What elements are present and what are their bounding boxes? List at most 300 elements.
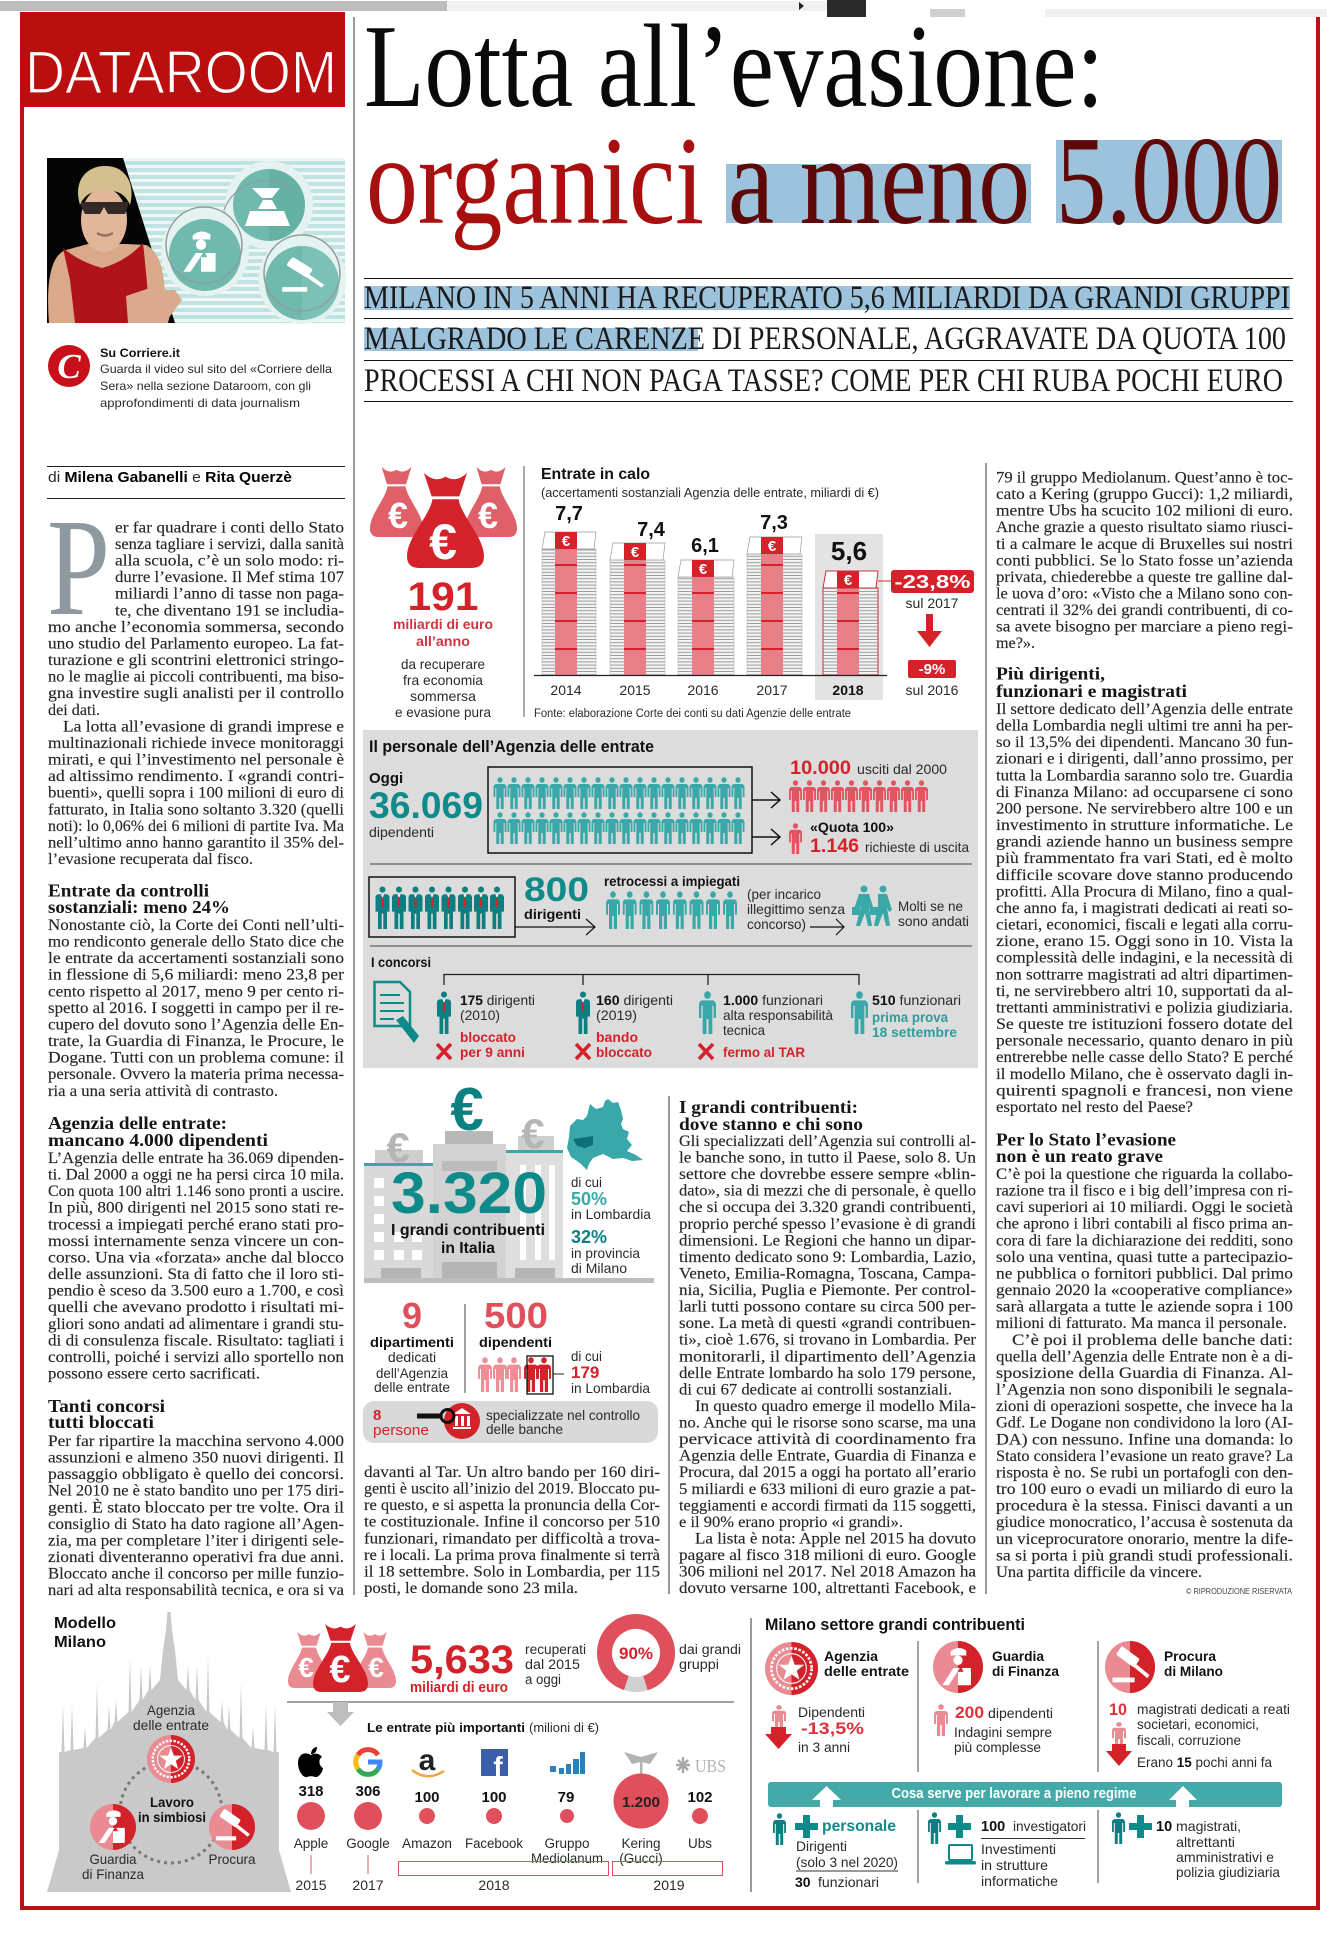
retrocessi a impiegati: [604, 874, 740, 929]
article column 2 continuation: posti, le domande sono 23 mila.: [364, 1580, 578, 1597]
node: Agenzia delle entrate: delle entrate: [133, 1717, 209, 1733]
note: molti se ne sono andati: sono andati: [898, 913, 969, 929]
stat: 5,633 miliardi: €: [329, 1649, 351, 1691]
article column 4: bottom: C’è poi la questione che riguarda la collabo-: [996, 1166, 1293, 1183]
bar 2017: €: [768, 538, 777, 555]
arrows out: [752, 792, 780, 845]
percent change callouts: -9%: [919, 661, 945, 678]
heading: tanti concorsi: Tanti concorsi: [48, 1396, 165, 1416]
stat: quota 100: 1.146: [810, 836, 859, 857]
bar 2016: €: [699, 561, 708, 578]
map: Lombardia: [567, 1099, 643, 1170]
title: Lotta all’evasione:: [364, 0, 1104, 132]
article column 1: concorsi: zionati diventeranno operativi fra due anni.: [48, 1549, 344, 1566]
article column 1: intro: turazione e gli scontrini elettronici stringo-: [48, 652, 344, 669]
company names: Mediolanum: [531, 1851, 603, 1866]
concorso: 160 dirigenti: (2019): [596, 1007, 637, 1023]
Corriere.it promo: C: [57, 347, 81, 386]
presenter: [48, 166, 182, 323]
heading: per lo stato: [996, 1129, 1176, 1166]
Guardia di Finanza column: dipendenti: [988, 1705, 1053, 1721]
article column 2 continuation: te costituzionale. Infine il concorso per 510: [364, 1514, 660, 1531]
panel: Milano settore grandi contribuenti: Milano settore grandi contribuenti: [765, 1616, 1025, 1634]
subheadline: [364, 278, 1293, 402]
bar 2016: [678, 535, 734, 675]
year labels: 2017: [756, 682, 788, 698]
need: personale: personale: [822, 1818, 896, 1835]
article column 1: intro: mirati, e qui l’investimento nel personale è: [48, 752, 344, 768]
drop cap: P: [47, 491, 110, 645]
heading: agenzia delle entrate: [48, 1113, 268, 1150]
heading: i grandi contribuenti: dove stanno e chi sono: [679, 1114, 863, 1134]
money bags: 191 billion: [370, 467, 517, 720]
panel: modello Milano: [47, 1612, 291, 1892]
article column 4: bottom: giudice monocratico, l’accusa è sostenuta da: [996, 1514, 1293, 1531]
years: 2018: [478, 1877, 510, 1893]
article column 1: agenzia: di di consulenza fiscale. Risultato: tagliati i: [48, 1332, 345, 1349]
logo: Apple: [298, 1747, 323, 1777]
buildings: 3.320 grandi contribuenti: €: [521, 1110, 545, 1157]
article column 4: top: privata, chiederebbe a queste tre galline dal-: [996, 569, 1293, 586]
heading: i grandi contribuenti: [679, 1097, 863, 1134]
article column 3: pagare al fisco 318 milioni di euro. Google: [679, 1547, 976, 1564]
chart: entrate in calo: (accertamenti sostanziali Agenzia delle entrate, miliardi di €): [541, 486, 879, 500]
money bags: 191 billion: €: [429, 514, 457, 570]
need: 10 magistrati: amministrativi e: [1176, 1849, 1274, 1865]
article column 4: middle: non sottrarre magistrati ad altri dipartimen-: [996, 966, 1293, 983]
concorso: 510 funzionari: prima prova: [872, 1009, 948, 1025]
article column 4: middle: della Lombardia negli ultimi tre anni ha per-: [996, 718, 1293, 735]
article column 1: agenzia: delle assunzioni. Sta di fatto che il loro sti-: [48, 1266, 344, 1283]
Procura di Milano column: di Milano: [1164, 1663, 1223, 1679]
heading: i grandi contribuenti: I grandi contribuenti:: [679, 1097, 858, 1117]
article column 1: agenzia: corso. Una via «forzata» anche dal blocco: [48, 1250, 344, 1266]
chart: le entrate più importanti: [294, 1720, 726, 1893]
concorso: 175 dirigenti: (2010): [460, 1007, 500, 1023]
byline: [47, 466, 345, 498]
article column 3: e il 90% erano proprio «i grandi».: [679, 1514, 903, 1531]
article column 4: bottom: Gdf. Le Dogane non condividono la loro (AI-: [996, 1415, 1293, 1432]
stat: 800 dirigenti: dirigenti: [524, 906, 581, 922]
callout: 8 persone banche: 8: [373, 1407, 381, 1424]
article column 3: pervicace attività di coordinamento fra: [679, 1431, 976, 1448]
company names: Google: [346, 1836, 390, 1851]
icon circles: [161, 161, 346, 324]
article column 3: larli tutti possono contare su circa 500 per-: [679, 1299, 976, 1316]
heading: più dirigenti: Più dirigenti,: [996, 664, 1105, 684]
Corriere.it promo: Sera» nella sezione Dataroom, con gli: [100, 379, 311, 393]
Agenzia delle entrate column: in 3 anni: [798, 1739, 850, 1755]
article column 1: concorsi: nari ad alta responsabilità tecnica, e ora si va: [48, 1582, 344, 1599]
company names: Gruppo: [544, 1836, 590, 1851]
logo: UBS: [676, 1756, 726, 1776]
article column 4: bottom: sposizione della Guardia di Finanza. Al-: [996, 1365, 1293, 1382]
stat: Lombardia percentages: [571, 1174, 651, 1276]
bar 2017: 7,3: [760, 512, 788, 534]
Corriere.it promo: Guarda il video sul sito del «Corriere della: [100, 362, 332, 376]
stat: 5,633 miliardi: 5,633: [410, 1638, 514, 1682]
heading: entrate da controlli: Entrate da controlli: [48, 881, 209, 901]
panel: il personale dell'Agenzia delle entrate: [363, 730, 978, 1068]
donut: 90%: 90%: [619, 1644, 653, 1663]
article column 4: middle: ti, ne servirebbero altri 10, supportati da al-: [996, 983, 1293, 1000]
donut: 90%: dai grandi: [679, 1642, 741, 1657]
heading: più dirigenti: [996, 664, 1187, 701]
article column 4: top: sa avete bisogno per marciare a pieno regi-: [996, 619, 1293, 636]
stat: 10.000 usciti: [789, 758, 947, 812]
article column 4: bottom: tro 100 euro o evadi un miliardo di euro la: [996, 1481, 1293, 1498]
Guardia di Finanza column: Indagini sempre: [954, 1724, 1052, 1740]
node: Procura: Procura: [208, 1851, 256, 1867]
article column 1: intro: fatturato, in Italia sono soltanto 3.320 (quelli: [48, 801, 345, 818]
article column 1: intro: La lotta all’evasione di grandi imprese e: [63, 718, 344, 735]
money bags: 191 billion: €: [478, 495, 498, 536]
article column 3: timento dedicato sono 9: Lombardia, Lazio,: [679, 1249, 976, 1266]
node: Guardia di Finanza: di Finanza: [82, 1866, 144, 1882]
stat: Lombardia percentages: in Lombardia: [571, 1206, 651, 1222]
article column 4: middle: zionari e i dirigenti, dall’anno prossimo, per: [996, 751, 1294, 768]
company names: Ubs: [688, 1836, 712, 1851]
node: Procura: [208, 1804, 256, 1867]
bar 2015: 7,4: [637, 519, 666, 541]
donut: 90%: gruppi: [679, 1657, 719, 1672]
stat: 36.069 dipendenti: Oggi: [369, 770, 403, 787]
node: Agenzia delle entrate: [133, 1702, 209, 1783]
article column 1: concorsi: genti. È stato bloccato per tre volte. Ora il: [48, 1499, 344, 1516]
stat: 36.069 dipendenti: [369, 770, 483, 840]
article column 3: sone. La metà di questi «grandi contribuen-: [679, 1315, 976, 1332]
logo: Facebook: [481, 1749, 508, 1782]
stat: 500 dipendenti: dipendenti: [479, 1334, 552, 1350]
money bags: 191 billion: sommersa: [410, 688, 476, 704]
buildings: 3.320 grandi contribuenti: [364, 1076, 654, 1283]
concorso: 160 dirigenti: 160 dirigenti: [596, 992, 673, 1008]
bar 2014: 7,7: [555, 503, 583, 525]
years: 2015: [295, 1877, 327, 1893]
percent change callouts: sul 2017: [906, 595, 959, 611]
buildings: 3.320 grandi contribuenti: 3.320: [391, 1161, 547, 1226]
need: personale: (solo 3 nel 2020): [796, 1854, 898, 1870]
concorso: 510 funzionari: 18 settembre: [872, 1024, 957, 1040]
year labels: 2015: [619, 682, 651, 698]
article column 3: dimensioni. Le Regioni che hanno un dipar-: [679, 1232, 976, 1249]
article column 4: bottom: cora di fare la dichiarazione dei redditi, sono: [996, 1232, 1293, 1249]
article column 4: middle: difficile scovare dove stanno producendo: [996, 867, 1293, 884]
stat: 36.069 dipendenti: dipendenti: [369, 824, 434, 840]
values: 100: [414, 1789, 440, 1806]
i concorsi heading: I concorsi: [371, 954, 431, 970]
article column 1: entrate: le entrate da accertamenti sostanziali sono: [48, 950, 344, 967]
article column 1: entrate: cupero del dovuto sono l’Agenzia delle En-: [48, 1016, 344, 1034]
article column 3: delle Entrate lombardo ha solo 179 persone,: [679, 1365, 976, 1382]
stat: 10.000 usciti: 10.000: [790, 758, 851, 779]
article column 3: le banche sono, in tutto il Paese, solo 8. Un: [679, 1150, 976, 1167]
article column 1: intro: noti): lo 0,06% dei 6 milioni di partite Iva. Ma: [48, 818, 344, 835]
article column 1: agenzia: ti. Dal 2000 a oggi ne ha persi circa 10 mila.: [48, 1167, 344, 1184]
logo: Amazon: a: [419, 1744, 436, 1777]
masthead: Dataroom: DATAROOM: [25, 39, 337, 106]
heading: più dirigenti: funzionari e magistrati: [996, 681, 1187, 701]
article column 1: agenzia: trocessi a impiegati perché erano stati pro-: [48, 1216, 344, 1233]
need: personale: funzionari: [818, 1874, 879, 1890]
article column 1: concorsi: consiglio di Stato ha dato ragione all’Agen-: [48, 1516, 344, 1533]
bar 2014: [542, 503, 596, 675]
article column 1: agenzia: In più, 800 dirigenti nel 2015 sono stati re-: [48, 1200, 344, 1217]
stat: 36.069 dipendenti: 36.069: [369, 785, 483, 826]
article column 3: [679, 1133, 977, 1597]
article column 1: agenzia: possono essere certo sacrificati.: [48, 1366, 260, 1382]
title: organici: [366, 112, 704, 251]
buildings: 3.320 grandi contribuenti: €: [450, 1076, 484, 1143]
stat: 500 dipendenti: di cui: [571, 1348, 602, 1364]
article column 1: entrate: mo rendiconto generale dello Stato dice che: [48, 934, 344, 951]
need: 10 magistrati: magistrati,: [1176, 1818, 1241, 1834]
stat: 800 dirigenti: [515, 871, 595, 935]
article column 4: bottom: zioni di operazioni sospette, che invece ha la: [996, 1398, 1293, 1415]
concorso: 160 dirigenti: bloccato: [596, 1044, 652, 1060]
need: personale: 30: [795, 1874, 811, 1890]
values: [298, 1783, 713, 1811]
company names: Kering: [621, 1836, 661, 1851]
article column 3: La lista è nota: Apple nel 2015 ha dovuto: [695, 1530, 976, 1547]
vertical column rule: [353, 17, 355, 1595]
stat: Lombardia percentages: 50%: [571, 1189, 607, 1209]
year labels: 2014: [550, 682, 582, 698]
heading: per lo stato: non è un reato grave: [996, 1146, 1163, 1166]
article column 4: middle: 200 persone. Ne servirebbero altre 100 e un: [996, 800, 1293, 818]
stat: quota 100: richieste di uscita: [865, 839, 969, 855]
logo: Facebook: f: [493, 1751, 503, 1782]
article column 1: intro: nell’ultimo anno hanno garantito il 35% del-: [48, 834, 344, 851]
icon: people walking away: [852, 886, 892, 926]
lavoro in simbiosi: in simbiosi: [138, 1809, 206, 1825]
article column 3: 306 milioni nel 2017. Nel 2018 Amazon ha: [679, 1564, 976, 1581]
year labels: 2018: [832, 682, 864, 698]
article column 3: monitorarli, il dipartimento dell’Agenzia: [679, 1348, 976, 1365]
article column 4: bottom: DA) con nessuno. Infine una domanda: lo: [996, 1431, 1293, 1448]
stat: 500 dipendenti: 500: [484, 1295, 548, 1336]
byline: di Milena Gabanelli e Rita Querzè: [48, 469, 292, 486]
article column 4: middle: grandi aziende hanno un business sempre: [996, 834, 1293, 851]
company names: Amazon: [402, 1836, 452, 1851]
company names: [294, 1836, 712, 1866]
bar 2018: €: [844, 572, 853, 589]
stat: 9 dipartimenti: [370, 1295, 454, 1395]
article column 2 continuation: davanti al Tar. Un altro bando per 160 diri-: [364, 1464, 660, 1481]
article column 4: middle: entrerebbe nelle casse dello Stato? E perché: [996, 1049, 1293, 1066]
article column 4: middle: quirenti spagnoli e francesi, non viene: [996, 1082, 1293, 1099]
heading: per lo stato: Per lo Stato l’evasione: [996, 1129, 1176, 1149]
article column 1: agenzia: gliori sono andati ad alimentare i grandi stu-: [48, 1316, 344, 1333]
article column 1: agenzia: Con quota 100 altri 1.146 sono pronti a uscire.: [48, 1183, 344, 1200]
article column 1: intro: ad altissimo rendimento. I «grandi contri-: [48, 768, 344, 785]
need: 100 investigatori: 100: [981, 1819, 1005, 1835]
photo: presenter with icons: [47, 158, 346, 324]
stat: 9 dipartimenti: dell’Agenzia: [376, 1365, 448, 1381]
Corriere.it promo: [48, 345, 332, 410]
article column 4: bottom: razione tra il fisco e i big dell’impresa con ri-: [996, 1183, 1293, 1200]
Procura di Milano column: [1105, 1641, 1290, 1770]
article column 1: intro: uno studio del Parlamento europeo. La fat-: [48, 636, 344, 652]
money bags: 191 billion: da recuperare: [401, 656, 485, 672]
article column 1: entrate: ria a una seria attività di contrasto.: [48, 1083, 278, 1100]
logo: Amazon: [412, 1744, 444, 1777]
duomo silhouette: [47, 1612, 291, 1892]
article column 1: agenzia: controlli, poiché i servizi allo sportello non: [48, 1349, 344, 1366]
article column 4: bottom: cavi superiori ai 10 miliardi. Oggi le società: [996, 1199, 1293, 1216]
Agenzia delle entrate column: [765, 1642, 909, 1755]
Agenzia delle entrate column: Dipendenti: [798, 1704, 865, 1720]
article column 3: proprio perché spesso l’evasione è di grandi: [679, 1216, 977, 1233]
article column 1: intro: alla scuola, c’è un solo modo: ri-: [115, 553, 344, 570]
article column 4: bottom: sarà allargata a tutte le aziende sopra i 100: [996, 1299, 1293, 1316]
article column 1: intro: senza tagliare i servizi, dalla sanità: [115, 536, 344, 553]
article column 4: middle: il modello Milano, che è osservato dagli in-: [996, 1066, 1293, 1083]
stat: 500 dipendenti: in Lombardia: [571, 1380, 650, 1396]
note: per incarico illegittimo: illegittimo senza: [747, 901, 845, 917]
percent change callouts: [878, 570, 974, 698]
banner: cosa serve: Cosa serve per lavorare a pieno regime: [892, 1786, 1136, 1802]
stat: Lombardia percentages: di Milano: [571, 1260, 627, 1276]
bar 2018: [823, 536, 878, 675]
article column 1: entrate: cento rispetto al 2017, meno 9 per cento ri-: [48, 983, 344, 1000]
money bags: 191 billion: 191: [408, 575, 478, 619]
bar 2014: €: [562, 533, 571, 550]
money bags: 191 billion: miliardi di euro: [393, 616, 493, 632]
article column 3: di cui 67 dedicate ai controlli sostanziali.: [679, 1381, 952, 1398]
company names: (Gucci): [619, 1851, 663, 1866]
heading: agenzia delle entrate: Agenzia delle entrate:: [48, 1113, 227, 1133]
article column 4: bottom: Stato considera l’evasione un reato grave? La: [996, 1448, 1293, 1465]
article column 4: middle: cietari, economici, fiscali e legati alla corru-: [996, 916, 1293, 934]
callout: 8 persone banche: delle banche: [486, 1421, 563, 1437]
concorso: 175 dirigenti: [437, 992, 535, 1060]
Guardia di Finanza column: [933, 1641, 1059, 1755]
Agenzia delle entrate column: delle entrate: [824, 1663, 909, 1679]
source note: Fonte: elaborazione Corte dei conti su dati Agenzie delle entrate: [534, 708, 851, 720]
article column 4: bottom: gennaio 2020 la «cooperative compliance»: [996, 1282, 1293, 1299]
article column 1: intro: mo anche l’economia sommersa, secondo: [48, 619, 344, 636]
need: 10 magistrati: altrettanti: [1176, 1834, 1235, 1850]
Corriere.it promo: Su Corriere.it: [100, 346, 180, 360]
article column 2 continuation: funzionari, rimandato per difficoltà a trova-: [364, 1530, 660, 1547]
article column 4: bottom: sa si porta i più grandi studi professionali.: [996, 1547, 1293, 1564]
article column 3: dato», sia di mezzi che di personale, è quello: [679, 1183, 976, 1200]
article column 4: middle: esportato nel resto del Paese?: [996, 1099, 1193, 1116]
heading: modello Milano: [54, 1615, 116, 1651]
money bags: 191 billion: €: [388, 495, 408, 536]
concorso: 175 dirigenti: bloccato: [460, 1029, 516, 1045]
article column 1: intro: multinazionali richiede invece monitoraggi: [48, 735, 345, 752]
stat: Lombardia percentages: di cui: [571, 1174, 602, 1190]
article column 4: middle: tutta la Lombardia saranno solo tre. Guardia: [996, 767, 1293, 784]
article column 4: bottom: un viceprocuratore onorario, mentre la dife-: [996, 1531, 1293, 1548]
company names: Facebook: [465, 1836, 523, 1851]
retrocessi a impiegati: retrocessi a impiegati: [604, 874, 740, 889]
article column 4: middle: Il settore dedicato dell’Agenzia delle entrate: [996, 701, 1293, 718]
Procura di Milano column: magistrati dedicati a reati: [1137, 1701, 1290, 1717]
buildings: 3.320 grandi contribuenti: €: [386, 1124, 410, 1171]
Guardia di Finanza column: 200: [955, 1703, 984, 1722]
concorso: 510 funzionari: 510 funzionari: [872, 992, 961, 1008]
chart: entrate in calo: [534, 466, 974, 720]
concorso: 1.000 funzionari: fermo al TAR: [723, 1044, 805, 1060]
article column 4: top: [996, 470, 1294, 652]
note: per incarico illegittimo: [747, 886, 845, 935]
concorso: 1.000 funzionari: 1.000 funzionari: [723, 992, 823, 1008]
masthead: Dataroom: [20, 12, 345, 107]
stat: 5,633 miliardi: miliardi di euro: [410, 1680, 508, 1696]
stat: 5,633 miliardi: €: [368, 1652, 384, 1683]
node: Agenzia delle entrate: Agenzia: [147, 1702, 195, 1718]
concorso: 175 dirigenti: 175 dirigenti: [460, 992, 535, 1008]
article column 4: bottom: solo una ventina, quasi tutte a partecipazio-: [996, 1249, 1293, 1266]
money bags: 191 billion: e evasione pura: [395, 704, 491, 720]
article column 1: intro: no le maglie ai piccoli contribuenti, ma biso-: [48, 669, 344, 686]
article column 4: bottom: Una partita difficile da vincere.: [996, 1564, 1202, 1581]
title: [364, 0, 1282, 251]
note: per incarico illegittimo: (per incarico: [747, 886, 821, 902]
year labels: [550, 682, 864, 698]
lavoro in simbiosi: Lavoro: [150, 1794, 194, 1810]
stat: quota 100: [789, 819, 969, 857]
article column 2 continuation: genti è uscito all’inizio del 2019. Bloccato pu-: [364, 1481, 660, 1498]
Corriere.it promo: approfondimenti di data journalism: [100, 396, 300, 410]
need: 100 investigatori: in strutture: [981, 1857, 1048, 1873]
article column 3: Gli specializzati dell’Agenzia sui controlli al-: [679, 1133, 976, 1150]
logo: Mediolanum: [550, 1752, 585, 1774]
article column 1: intro: gna investire sugli analisti per il controllo: [48, 685, 344, 702]
article column 4: middle: zione, erano 15. Oggi sono in 10. Vista la: [996, 933, 1293, 950]
node: Guardia di Finanza: Guardia: [90, 1851, 137, 1867]
article column 4: bottom: l’Agenzia non sono disponibili le segnala-: [996, 1382, 1293, 1398]
logo: UBS: UBS: [695, 1756, 726, 1776]
buildings: 3.320 grandi contribuenti: I grandi contribuenti: [391, 1222, 545, 1239]
article column 1: entrate: [48, 917, 345, 1100]
article column 3: settore che dovrebbe essere sempre «blin-: [679, 1166, 976, 1183]
article column 1: entrate: Dogane. Tutti con un problema comune: il: [48, 1050, 344, 1067]
article column 4: top: mentre Ubs ha scucito 102 milioni di euro.: [996, 503, 1293, 520]
stat: 10.000 usciti: usciti dal 2000: [857, 761, 947, 777]
heading: agenzia delle entrate: mancano 4.000 dipendenti: [48, 1130, 268, 1150]
article column 4: middle: personale necessario, quanto denaro in più: [996, 1033, 1293, 1050]
article column 3: no. Anche qui le risorse sono scarse, ma una: [679, 1414, 976, 1432]
need: personale: Dirigenti: [796, 1838, 847, 1854]
article column 1: intro: buenti», quelli sopra i 100 milioni di euro di: [48, 785, 345, 802]
concorso: 175 dirigenti: per 9 anni: [460, 1044, 525, 1060]
Procura di Milano column: societari, economici,: [1137, 1716, 1259, 1732]
stat: 5,633 miliardi: recuperati: [525, 1642, 586, 1657]
article column 4: top: cato a Kering (gruppo Gucci): 1,2 miliardi,: [996, 486, 1293, 503]
Guardia di Finanza column: più complesse: [954, 1739, 1041, 1755]
article column 3: In questo quadro emerge il modello Mila-: [695, 1398, 976, 1415]
article column 1: intro: l’evasione recuperata dal fisco.: [48, 851, 253, 868]
need: personale: [773, 1813, 898, 1890]
bar 2017: [747, 512, 802, 675]
article column 1: concorsi: assunzioni e almeno 350 nuovi dirigenti. Il: [48, 1450, 344, 1467]
article column 2 continuation: [364, 1464, 660, 1597]
stat: Lombardia percentages: 32%: [571, 1227, 607, 1247]
stat: 5,633 miliardi: [288, 1624, 586, 1696]
stat: 9 dipartimenti: delle entrate: [374, 1379, 450, 1395]
people box: [488, 767, 752, 853]
article column 1: agenzia: pendio è sceso da 3.500 euro a 1.700, e così: [48, 1283, 345, 1300]
article column 1: concorsi: zia, ma per completare l’iter i dirigenti sele-: [48, 1532, 344, 1550]
stat: 9 dipartimenti: dipartimenti: [370, 1334, 454, 1350]
values: 306: [355, 1783, 381, 1800]
stat: 800 dirigenti: 800: [524, 871, 589, 909]
article column 1: concorsi: [48, 1433, 344, 1599]
